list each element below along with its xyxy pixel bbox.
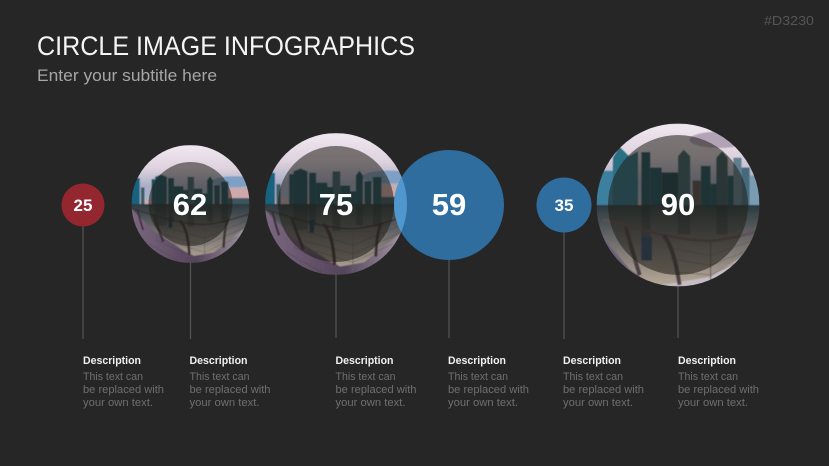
image circle 62 [132, 145, 257, 263]
description 62 [190, 355, 270, 409]
description 35: be replaced with [563, 384, 644, 396]
description 59: be replaced with [448, 384, 529, 396]
connector lines [83, 220, 678, 339]
circle 59: 59 [432, 187, 466, 222]
description 62: Description [190, 355, 248, 367]
description 59 [448, 355, 529, 409]
description 90: be replaced with [678, 384, 759, 396]
description 90: Description [678, 355, 736, 367]
image circle 75 [265, 133, 416, 275]
subtitle: Enter your subtitle here [37, 66, 217, 85]
circle 35 [536, 178, 592, 232]
image circle 75: 75 [319, 187, 353, 222]
description 25: be replaced with [83, 384, 164, 396]
description 90: your own text. [678, 397, 748, 409]
description 75: Description [336, 355, 394, 367]
description 62: This text can [190, 371, 250, 383]
watermark code: #D3230 [764, 13, 814, 28]
description 75 [336, 355, 416, 409]
description 35: your own text. [563, 397, 633, 409]
description 59: your own text. [448, 397, 518, 409]
description 35: Description [563, 355, 621, 367]
description 35 [563, 355, 644, 409]
description 25 [83, 355, 164, 409]
description 62: be replaced with [190, 384, 270, 396]
description 59: This text can [448, 371, 508, 383]
image circle 90: 90 [661, 187, 695, 222]
image circle 62: 62 [173, 187, 207, 222]
description 25: Description [83, 355, 141, 367]
description 35: This text can [563, 371, 623, 383]
description 25: your own text. [83, 397, 153, 409]
circle 25: 25 [74, 196, 92, 215]
description 62: your own text. [190, 397, 260, 409]
circle 59 [394, 150, 504, 260]
description 25: This text can [83, 371, 143, 383]
circle 35: 35 [555, 196, 573, 215]
description 90: This text can [678, 371, 738, 383]
description 90 [678, 355, 759, 409]
title: CIRCLE IMAGE INFOGRAPHICS [37, 31, 415, 61]
description 75: be replaced with [336, 384, 416, 396]
circle 25 [62, 184, 104, 226]
description 75: your own text. [336, 397, 406, 409]
description 75: This text can [336, 371, 396, 383]
image circle 90 [596, 124, 760, 286]
description 59: Description [448, 355, 506, 367]
